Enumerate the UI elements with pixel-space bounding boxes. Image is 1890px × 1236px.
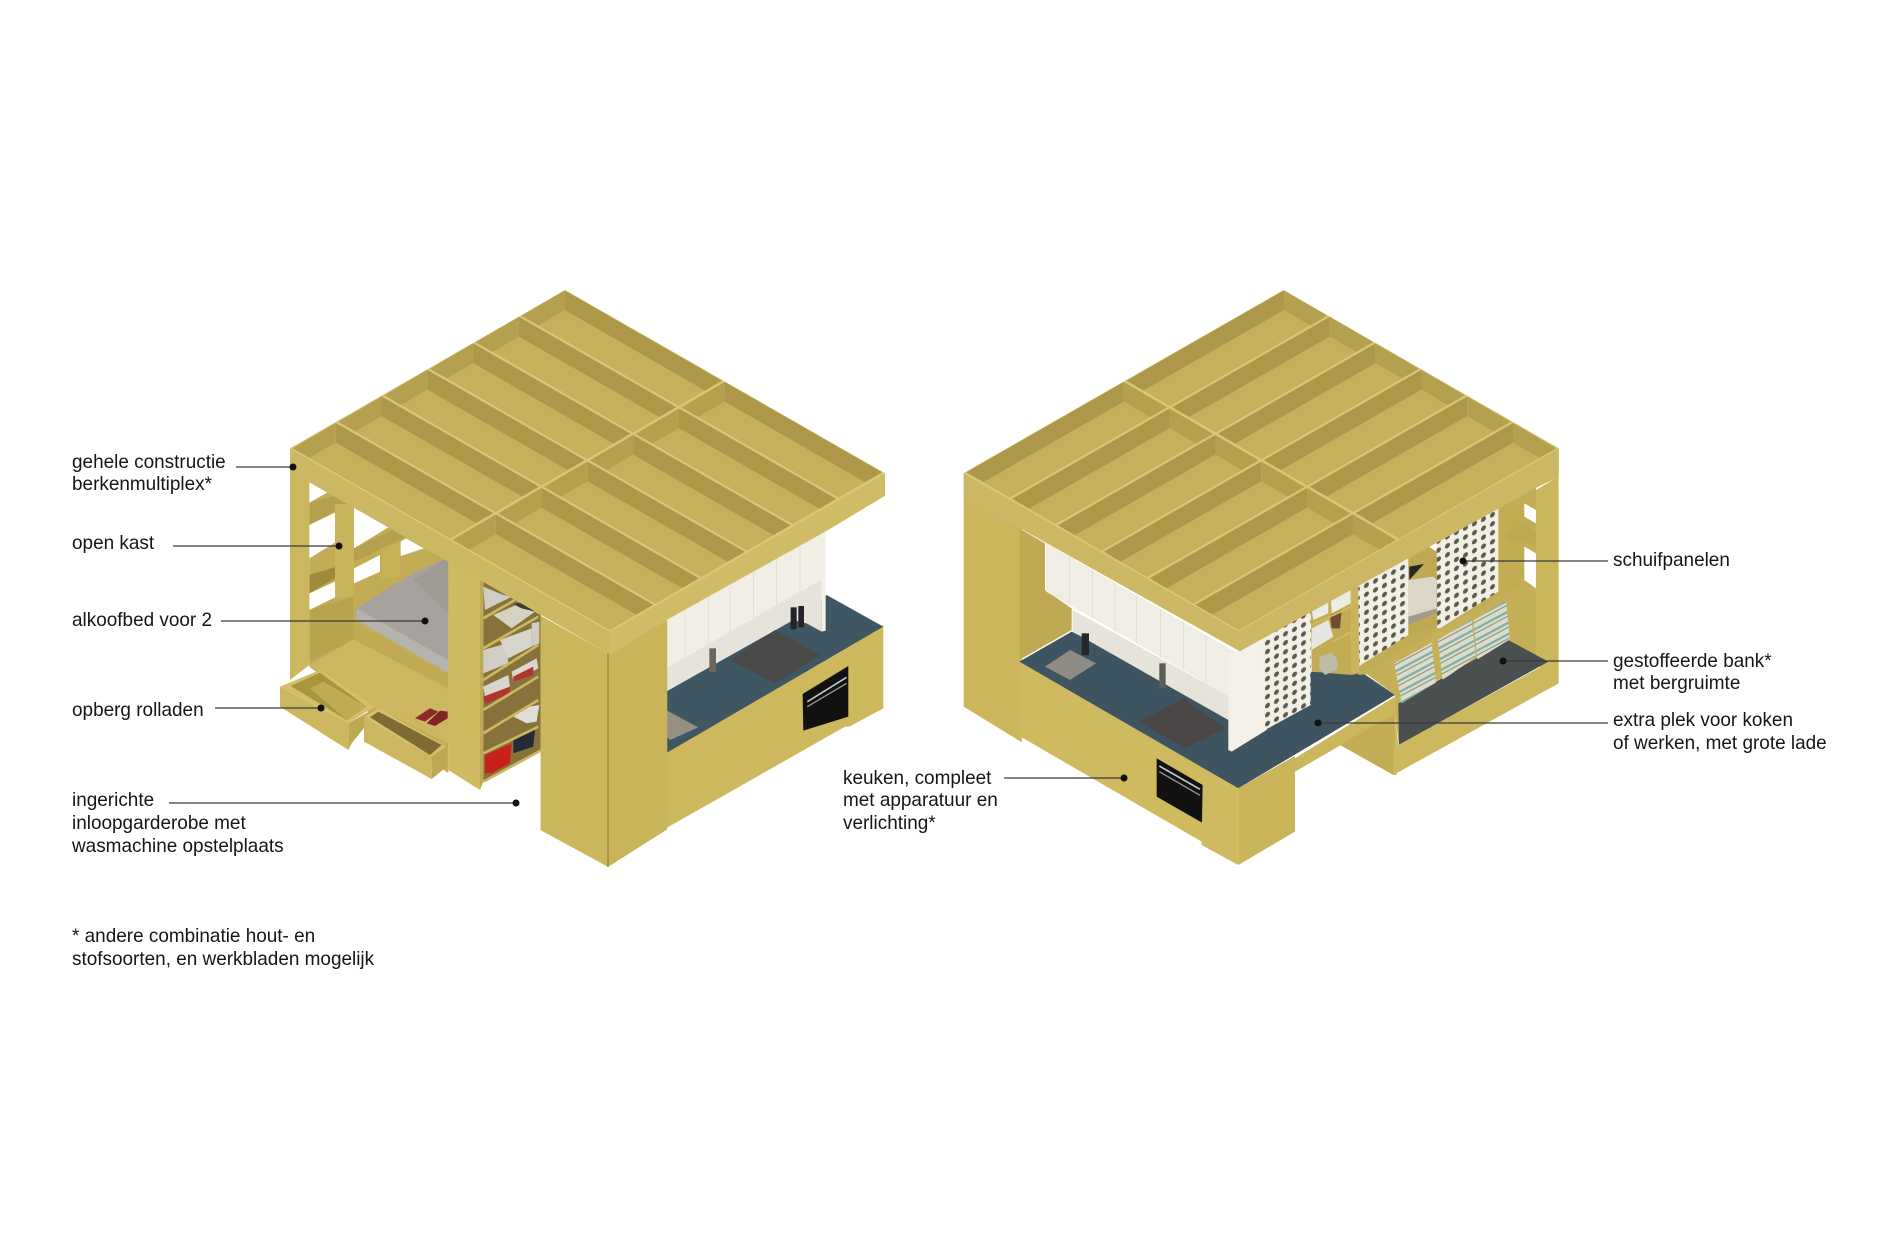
label: storage drawers	[72, 700, 324, 721]
label: whole construction birch multiplex: gehele constructie	[72, 452, 226, 473]
storage drawer one	[280, 670, 376, 750]
slippers	[415, 708, 448, 726]
label: walk-in wardrobe: ingerichte	[72, 790, 154, 811]
footnote: stofsoorten, en werkbladen mogelijk	[72, 949, 375, 970]
oven	[803, 666, 848, 731]
left corner post	[290, 460, 309, 680]
storage drawer two	[364, 708, 447, 779]
cushions	[1394, 600, 1510, 703]
middle post	[448, 558, 483, 790]
label: alcove bed for two	[72, 610, 428, 631]
label: walk-in wardrobe	[71, 790, 520, 857]
left corner wall	[964, 473, 1022, 742]
label: kitchen	[843, 768, 1128, 834]
countertop	[1019, 632, 1395, 788]
base side column	[1238, 756, 1295, 865]
upholstered bench seat	[1398, 640, 1548, 745]
bed base and platform	[310, 623, 448, 743]
label: walk-in wardrobe: wasmachine opstelplaats	[71, 836, 284, 857]
kitchen side	[1019, 528, 1395, 865]
label: kitchen: verlichting*	[843, 813, 936, 834]
walk-in wardrobe column	[541, 616, 667, 867]
footnote	[72, 926, 375, 970]
white end panel	[1228, 635, 1267, 752]
kitchen base cabinets	[666, 625, 883, 828]
induction hob	[730, 630, 820, 683]
footnote: * andere combinatie hout- en	[72, 926, 315, 947]
label: open cupboard	[72, 533, 342, 554]
kitchen base front	[1019, 658, 1238, 865]
side openings	[1507, 503, 1536, 588]
splashback	[1073, 610, 1230, 720]
roof storage trays	[290, 290, 885, 631]
label: storage drawers: opberg rolladen	[72, 700, 204, 721]
kitchen counter	[666, 595, 883, 753]
sink	[666, 710, 698, 740]
label: upholstered bench: met bergruimte	[1613, 673, 1740, 694]
bottle and tap	[1082, 633, 1166, 688]
illustration: left cube, alcove bed and wardrobe side	[280, 290, 885, 867]
label: whole construction birch multiplex	[72, 452, 296, 495]
wall cabinets	[1046, 543, 1235, 697]
roof fascia	[964, 448, 1559, 651]
sliding perforated panels	[1263, 502, 1498, 730]
label: extra cooking or work space: of werken, met grote lade	[1613, 733, 1827, 754]
label: upholstered bench	[1500, 651, 1772, 694]
wardrobe shelves with clothes	[483, 582, 541, 782]
wood wall right of panels	[1498, 487, 1525, 600]
worktop extension and lower module	[1295, 697, 1397, 775]
shelves between panels	[1311, 578, 1358, 675]
label: sliding panels	[1460, 550, 1730, 571]
roof fascia	[290, 448, 885, 654]
label: kitchen: keuken, compleet	[843, 768, 992, 789]
recess wall	[1019, 528, 1072, 660]
bench front	[1393, 663, 1559, 775]
label: alcove bed for two: alkoofbed voor 2	[72, 610, 212, 631]
right corner post	[1536, 477, 1559, 683]
hob	[1139, 698, 1225, 748]
roof storage trays	[963, 290, 1559, 631]
label: open cupboard: open kast	[72, 533, 155, 554]
label: kitchen: met apparatuur en	[843, 790, 998, 811]
label: extra cooking or work space: extra plek voor koken	[1613, 710, 1793, 731]
label: upholstered bench: gestoffeerde bank*	[1613, 651, 1772, 672]
back wall behind panels	[1358, 487, 1536, 675]
label: extra cooking or work space	[1314, 710, 1827, 754]
alcove interior, bed, drawers and wardrobe shelves	[280, 460, 541, 790]
label: sliding panels: schuifpanelen	[1613, 550, 1730, 571]
label: walk-in wardrobe: inloopgarderobe met	[72, 813, 246, 834]
oven	[1157, 758, 1203, 823]
bottle and pepper mills	[709, 606, 804, 672]
sink	[1045, 650, 1096, 680]
bench side	[1263, 477, 1559, 775]
alcove bed	[356, 557, 448, 673]
kitchen wall cabinets and splashback	[666, 528, 826, 692]
bench back	[1363, 583, 1536, 745]
illustration: right cube, kitchen and bench side	[963, 290, 1559, 865]
open cupboard back wall with openings	[309, 480, 448, 773]
kitchen	[666, 528, 883, 828]
room behind panels with bed	[1408, 536, 1437, 635]
label: whole construction birch multiplex: berkenmultiplex*	[72, 474, 213, 495]
